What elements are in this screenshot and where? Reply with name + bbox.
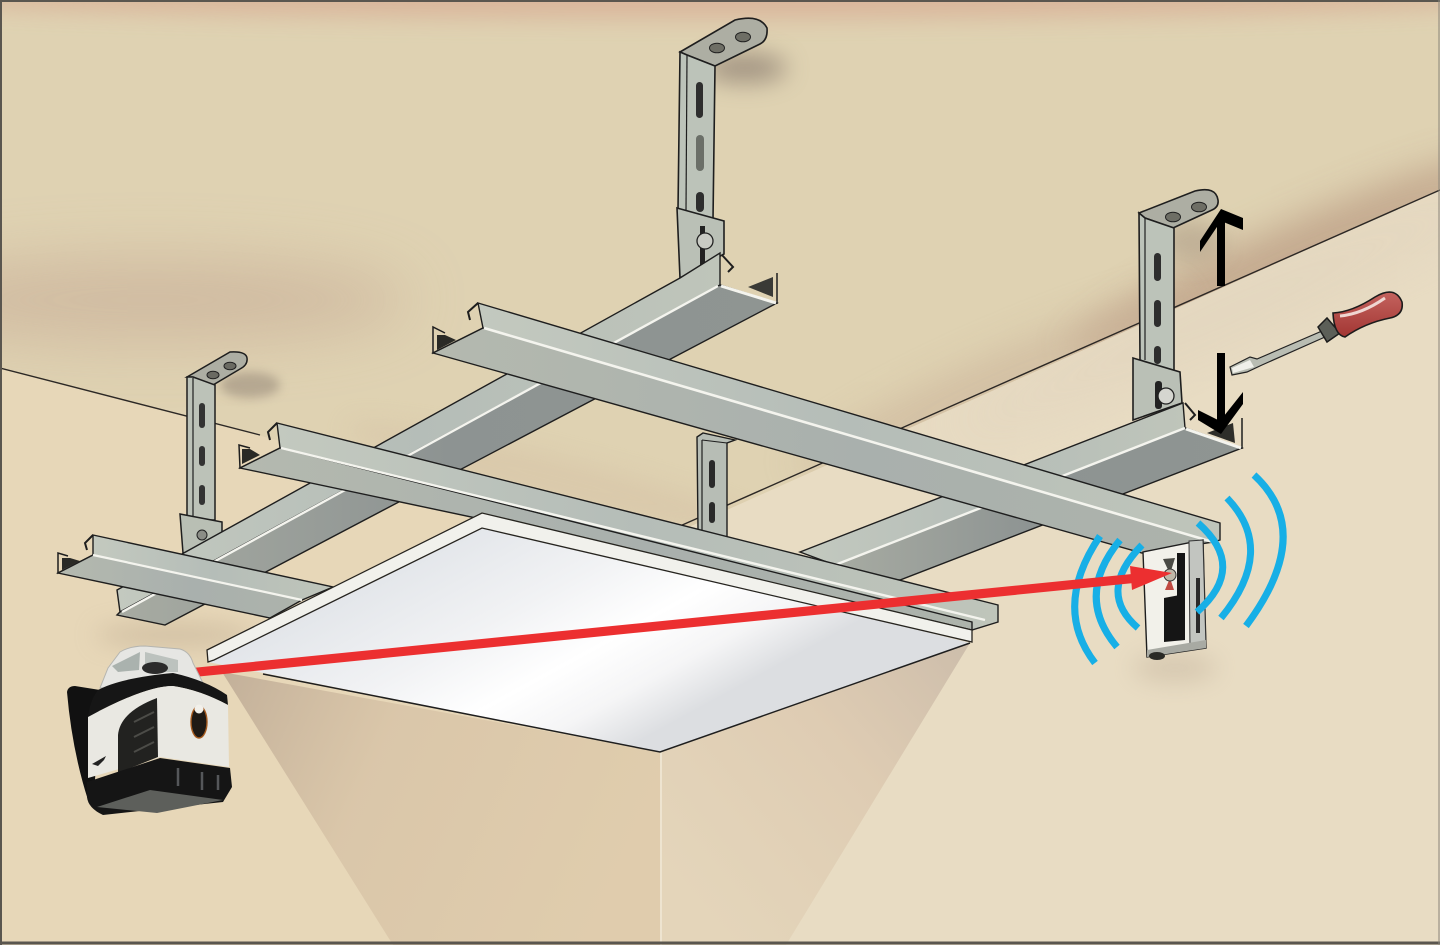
red laser beam arrow (182, 566, 1172, 678)
underside (97, 790, 223, 813)
icon: up arrow (1200, 209, 1243, 286)
laser receiver on rail (1143, 540, 1206, 660)
bracket: right hanger (1133, 190, 1218, 420)
black grip recess (118, 698, 158, 773)
wall shadow cones under panel (222, 672, 660, 945)
channel: lower cross rail (239, 423, 998, 630)
wall surfaces (84, 249, 1308, 682)
bracket: middle wall bracket (697, 433, 735, 537)
channel: right rail under right hanger (800, 403, 1242, 580)
ceiling surface (2, 2, 1440, 526)
channel: long rail running from centre hanger to front-left (117, 253, 777, 625)
bracket: centre hanger (677, 18, 767, 278)
status window (191, 706, 207, 738)
carrying handle (67, 686, 102, 812)
logo mark (92, 756, 106, 766)
white body (88, 686, 229, 778)
wall corner edges (0, 190, 1440, 945)
rubber base (87, 758, 232, 815)
channel: upper cross rail (433, 303, 1220, 553)
laser head dome (100, 646, 204, 688)
icon: rotary laser level (67, 646, 232, 815)
black collar (88, 673, 228, 717)
signal waves: blue arcs around receiver (1075, 475, 1283, 663)
icon: screwdriver (1230, 292, 1402, 375)
ceiling panel (207, 513, 972, 752)
bracket: left hanger (180, 352, 247, 553)
icon: down arrow (1198, 353, 1243, 434)
channel: short front-left rail (58, 535, 333, 618)
